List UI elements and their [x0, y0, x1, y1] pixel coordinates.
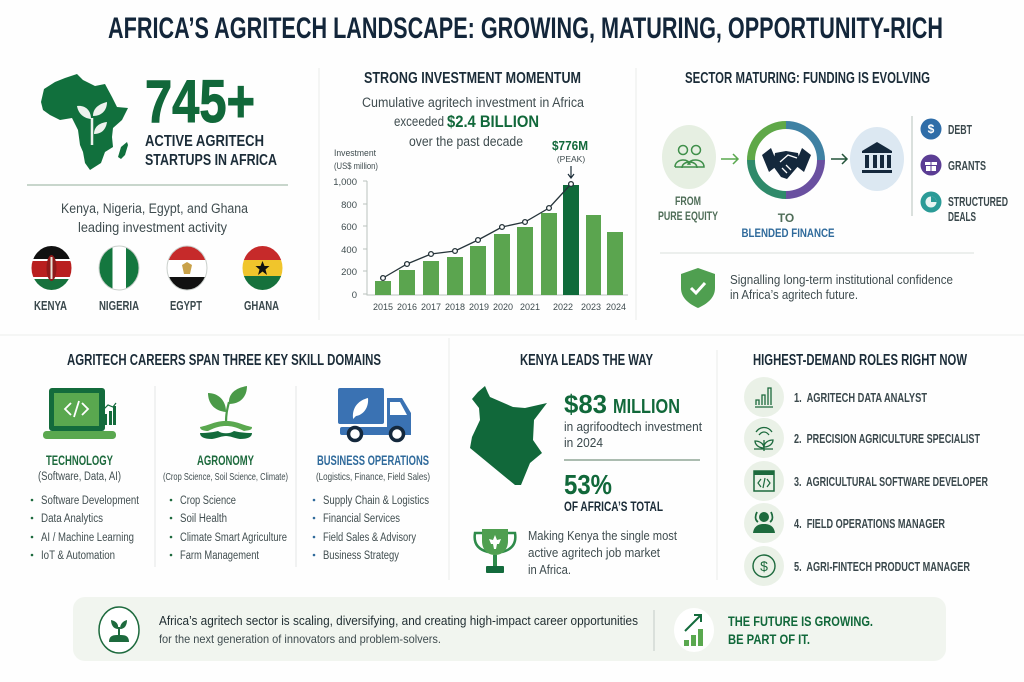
- role 5: $: [760, 558, 768, 574]
- x axis labels: 2019: [469, 302, 489, 312]
- technology list: AI / Machine Learning: [41, 532, 134, 544]
- business operations list: [313, 495, 429, 562]
- stat: 53 percent: OF AFRICA’S TOTAL: [564, 499, 663, 514]
- agronomy list: Soil Health: [180, 513, 227, 525]
- country labels: NIGERIA: [99, 299, 139, 313]
- x axis labels: 2024: [606, 302, 626, 312]
- icon: shield check: [681, 268, 715, 308]
- Kenya job market statement: in Africa.: [528, 562, 571, 577]
- country labels: [34, 299, 279, 313]
- cumulative investment text: Cumulative agritech investment in Africa: [362, 95, 584, 110]
- role 1: 1. AGRITECH DATA ANALYST: [794, 390, 927, 405]
- call to action: BE PART OF IT.: [728, 631, 810, 647]
- stat: 83 million: [564, 389, 702, 450]
- icon: seedling in soil: [200, 386, 252, 439]
- icon: delivery truck: [338, 388, 411, 440]
- peak callout: $776M: [552, 138, 588, 153]
- column: agronomy: [163, 386, 288, 562]
- business operations list: Supply Chain & Logistics: [323, 495, 429, 507]
- axis title: (US$ million): [334, 161, 378, 171]
- confidence statement: in Africa’s agritech future.: [730, 288, 858, 302]
- y axis labels: 600: [341, 222, 357, 233]
- icon: sprout badge: [99, 607, 139, 653]
- country labels: GHANA: [244, 299, 279, 313]
- icon: growth chart: [674, 608, 714, 652]
- agronomy list: [170, 495, 287, 562]
- startups label: ACTIVE AGRITECH: [145, 133, 264, 150]
- business operations list: Field Sales & Advisory: [323, 532, 416, 544]
- funding type: structured deals: [920, 192, 1008, 224]
- confidence statement: Signalling long-term institutional confidence: [730, 273, 953, 287]
- role 5: [744, 546, 970, 586]
- y axis labels: 200: [341, 267, 357, 278]
- panel: Kenya leads: [470, 352, 702, 577]
- x axis labels: 2022: [553, 302, 573, 312]
- x axis labels: 2015: [373, 302, 393, 312]
- arrow: equity to blended: [721, 154, 738, 164]
- flow labels: TO: [778, 211, 794, 225]
- role 4: 4. FIELD OPERATIONS MANAGER: [794, 516, 945, 531]
- heading: Kenya leads: KENYA LEADS THE WAY: [520, 352, 653, 369]
- cumulative investment text: [362, 95, 584, 149]
- leading countries text: leading investment activity: [78, 220, 227, 235]
- bottom banner: [73, 597, 946, 661]
- x axis labels: 2021: [520, 302, 540, 312]
- panel: investment momentum: [333, 70, 628, 312]
- x axis labels: 2016: [397, 302, 417, 312]
- column: business operations: [313, 388, 430, 562]
- panel: startups in Africa: [27, 68, 288, 313]
- icon: pure equity people: [662, 125, 716, 189]
- icon: trophy: [475, 529, 515, 573]
- Kenya job market statement: [528, 528, 677, 577]
- flag: Egypt: [167, 246, 207, 290]
- x axis labels: 2018: [445, 302, 465, 312]
- banner message: Africa’s agritech sector is scaling, diversifying, and creating high-impact career opportunities: [159, 613, 638, 628]
- technology list: [31, 495, 140, 562]
- cumulative investment text: exceeded: [394, 114, 444, 129]
- axis title: Investment: [334, 148, 376, 158]
- stat: 53 percent: [564, 469, 663, 514]
- flag: Kenya: [31, 246, 72, 290]
- icon: Kenya map: [470, 386, 547, 485]
- arrow: blended to institutions: [831, 154, 847, 164]
- agronomy list: Crop Science: [180, 495, 236, 507]
- flow labels: [658, 194, 834, 240]
- icon: institution bank: [850, 127, 904, 191]
- stat: 83 million: in agrifoodtech investment: [564, 420, 702, 434]
- flow labels: BLENDED FINANCE: [742, 226, 834, 240]
- technology list: Software Development: [41, 495, 140, 507]
- agronomy list: Farm Management: [180, 550, 260, 562]
- agronomy title: [163, 452, 288, 483]
- flow labels: FROM: [675, 194, 701, 208]
- icon: blended finance ring with handshake: [751, 125, 821, 195]
- stat: 83 million: in 2024: [564, 436, 603, 450]
- role 3: [744, 461, 988, 501]
- icon: Africa map with plant: [41, 74, 128, 170]
- cumulative investment text: $2.4 BILLION: [447, 112, 539, 131]
- banner message: for the next generation of innovators and problem-solvers.: [159, 632, 441, 646]
- icon: laptop with code: [43, 388, 116, 439]
- y axis labels: 400: [341, 245, 357, 256]
- agronomy title: (Crop Science, Soil Science, Climate): [163, 471, 288, 483]
- country labels: EGYPT: [170, 299, 202, 313]
- business operations title: BUSINESS OPERATIONS: [317, 452, 429, 468]
- panel: funding evolving: [658, 70, 1008, 308]
- x axis labels: 2020: [493, 302, 513, 312]
- funding type: structured deals: DEALS: [948, 209, 976, 224]
- heading: skill domains: AGRITECH CAREERS SPAN THREE KEY SKILL DOMAINS: [67, 352, 381, 369]
- technology list: IoT & Automation: [41, 550, 115, 562]
- confidence statement: [730, 273, 953, 302]
- axis title: [334, 148, 378, 171]
- x axis labels: 2017: [421, 302, 441, 312]
- stat: 53 percent: 53%: [564, 469, 612, 500]
- x axis labels: 2023: [581, 302, 601, 312]
- panel: skill domains: [31, 352, 430, 567]
- role 2: [744, 418, 980, 458]
- funding type: debt: $: [928, 122, 935, 136]
- role 1: [744, 377, 927, 417]
- business operations title: [316, 452, 430, 483]
- heading: funding evolving: SECTOR MATURING: FUNDING IS EVOLVING: [685, 70, 930, 87]
- stat: 83 million: MILLION: [613, 396, 680, 418]
- funding type: debt: DEBT: [948, 122, 972, 137]
- stat: 83 million: $83: [564, 389, 607, 419]
- bar and line chart: [333, 138, 628, 312]
- flag: Nigeria: [99, 246, 140, 290]
- peak callout: (PEAK): [557, 154, 585, 164]
- funding type: debt: [920, 118, 972, 140]
- funding type: grants: [920, 154, 986, 176]
- heading: investment momentum: STRONG INVESTMENT MOMENTUM: [364, 70, 581, 87]
- technology title: TECHNOLOGY: [46, 452, 113, 468]
- bars: [375, 185, 623, 295]
- call to action: THE FUTURE IS GROWING.: [728, 613, 873, 629]
- cumulative investment text: over the past decade: [409, 134, 523, 149]
- big number 745+: 745+: [145, 68, 255, 135]
- startups label: [145, 133, 277, 169]
- leading countries text: Kenya, Nigeria, Egypt, and Ghana: [61, 201, 248, 216]
- Kenya job market statement: active agritech job market: [528, 545, 660, 560]
- column: technology: [31, 388, 140, 562]
- banner message: [159, 613, 638, 646]
- technology title: (Software, Data, AI): [38, 471, 121, 483]
- y axis labels: 800: [341, 200, 357, 211]
- technology title: [38, 452, 121, 483]
- country labels: KENYA: [34, 299, 67, 313]
- technology list: Data Analytics: [41, 513, 103, 525]
- leading countries text: [61, 201, 248, 235]
- business operations list: Business Strategy: [323, 550, 399, 562]
- panel: highest-demand roles: [744, 352, 988, 586]
- flow labels: PURE EQUITY: [658, 209, 718, 223]
- agronomy list: Climate Smart Agriculture: [180, 532, 287, 544]
- business operations list: Financial Services: [323, 513, 400, 525]
- role 4: [744, 503, 945, 543]
- agronomy title: AGRONOMY: [197, 452, 254, 468]
- call to action: [728, 613, 873, 647]
- startups label: STARTUPS IN AFRICA: [145, 152, 277, 169]
- Kenya job market statement: Making Kenya the single most: [528, 528, 677, 543]
- flag: Ghana: [242, 246, 283, 290]
- business operations title: (Logistics, Finance, Field Sales): [316, 471, 430, 483]
- y axis labels: [333, 177, 357, 301]
- x axis labels: [373, 302, 626, 312]
- peak callout: [552, 138, 588, 178]
- y axis labels: 0: [352, 290, 357, 301]
- y axis labels: 1,000: [333, 177, 357, 188]
- funding type: grants: GRANTS: [948, 158, 986, 173]
- trend line: [381, 182, 573, 280]
